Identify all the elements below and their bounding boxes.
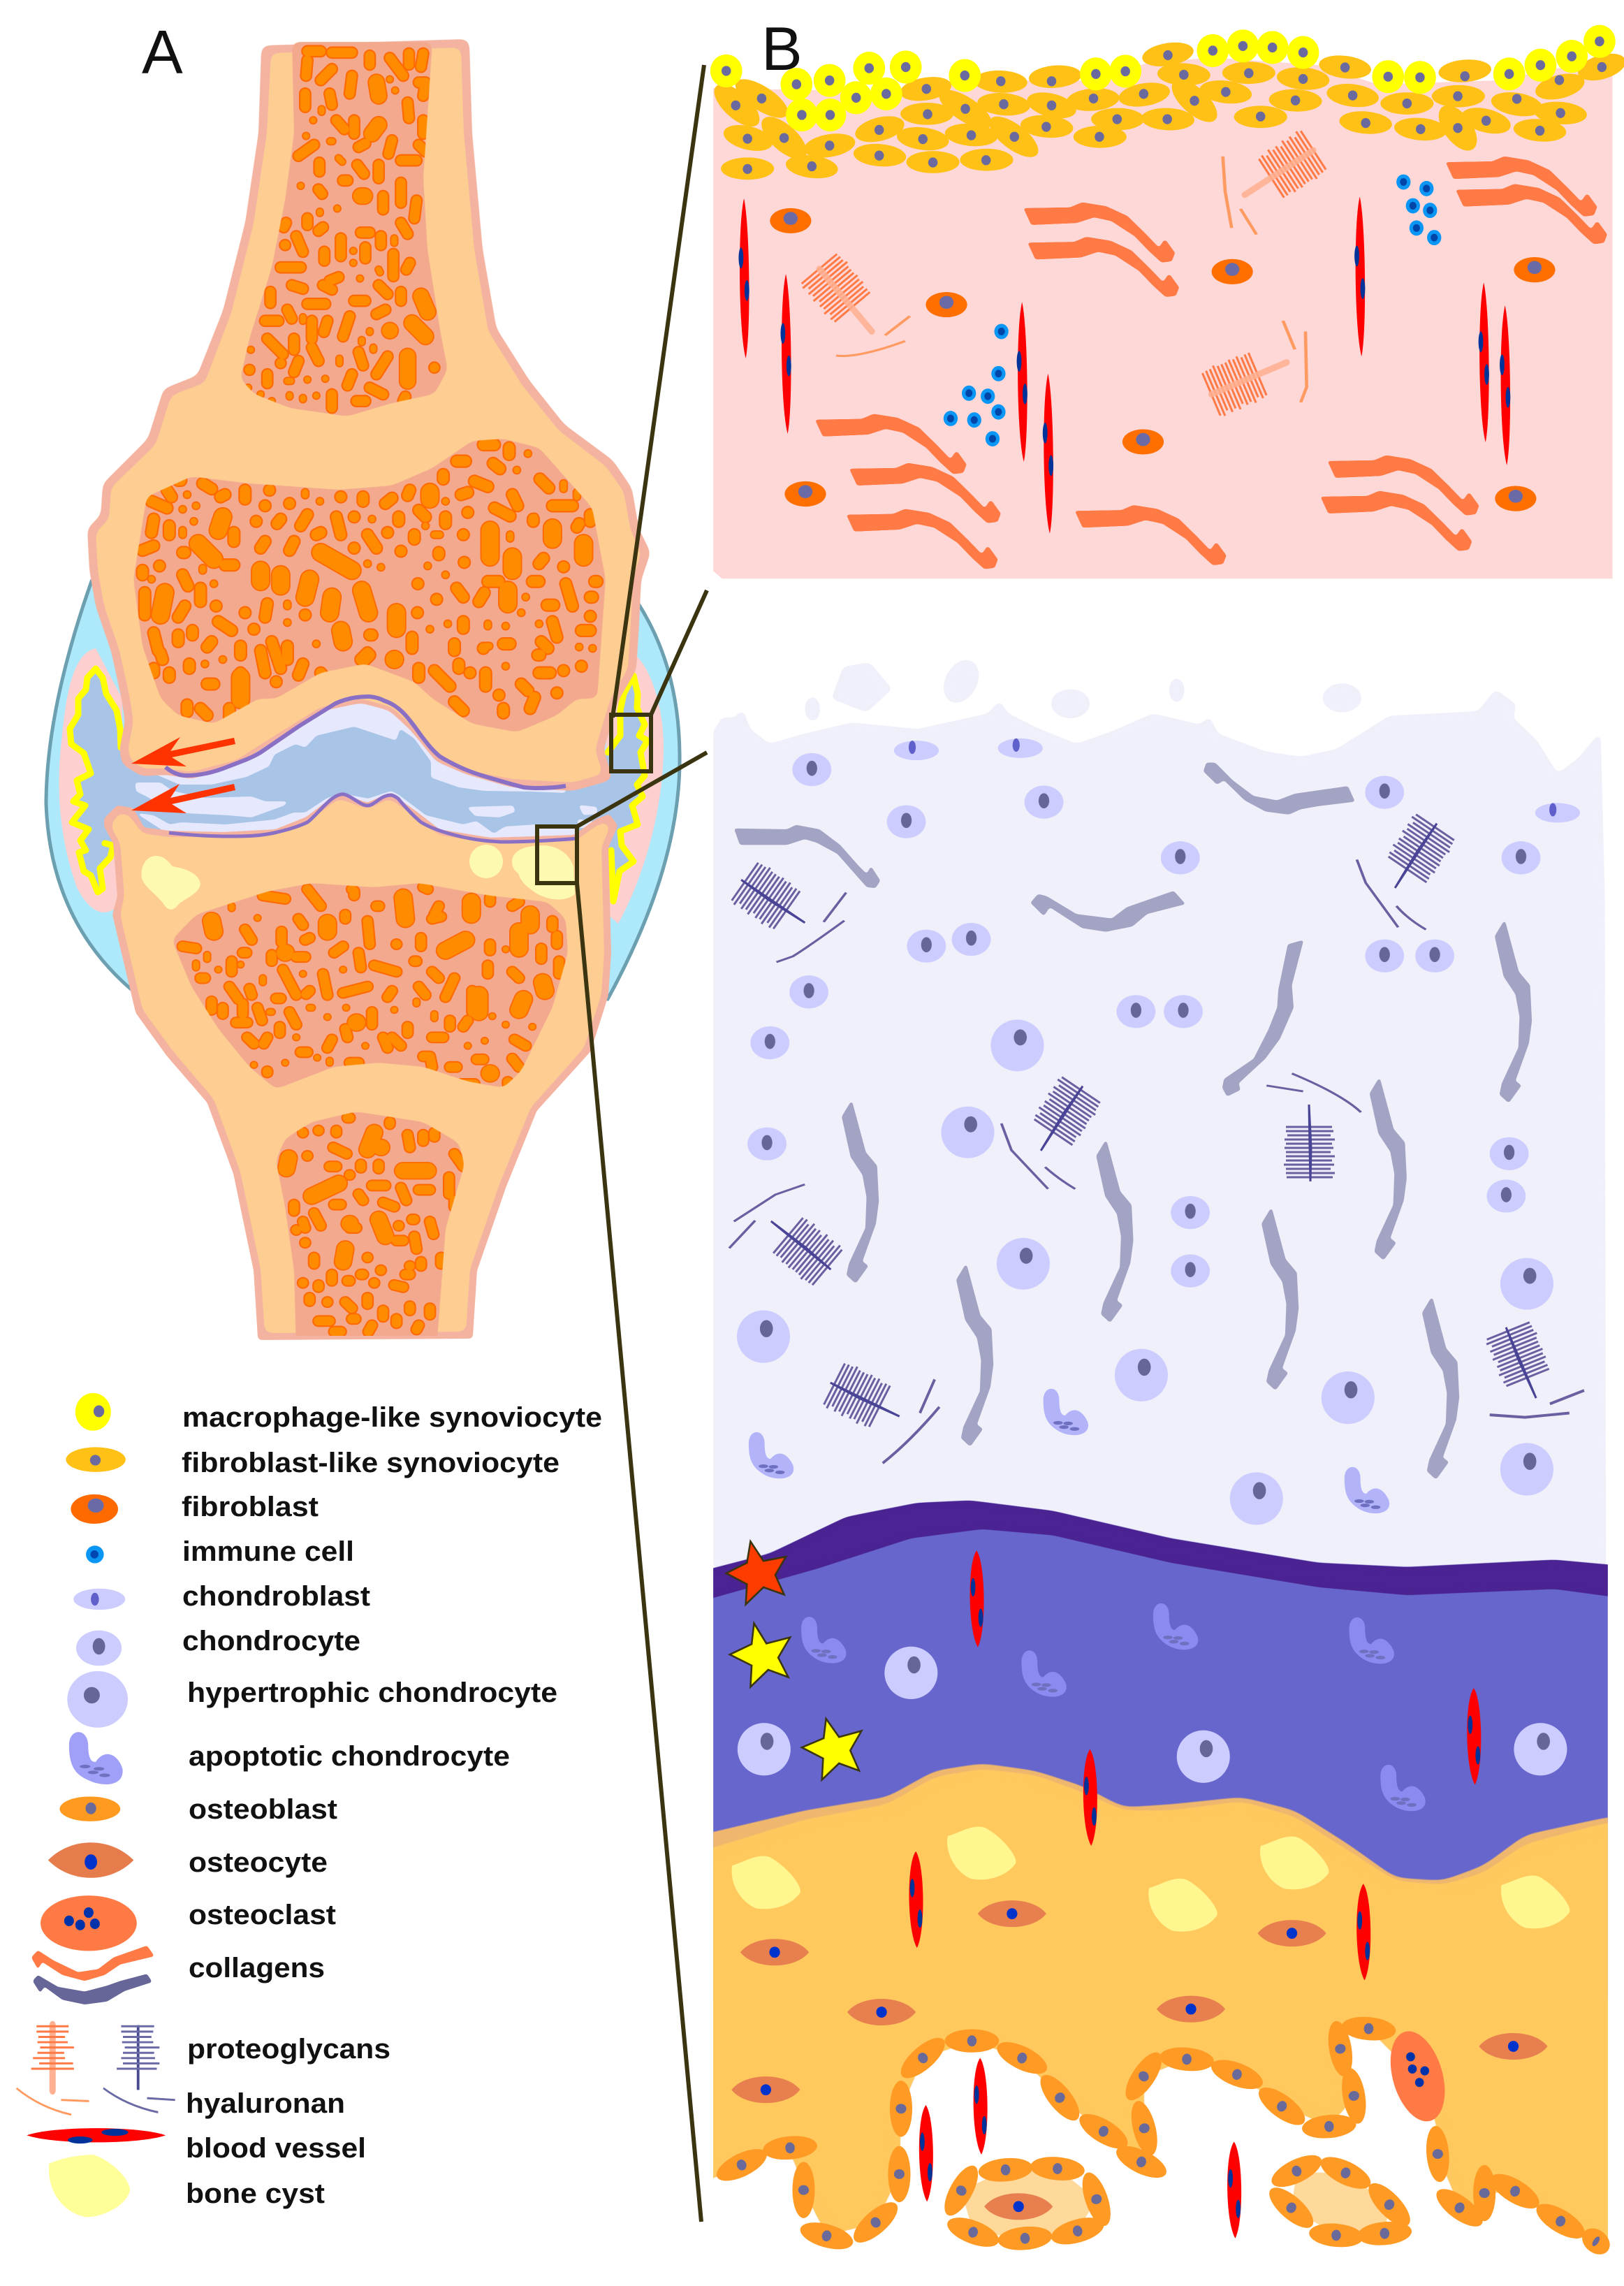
cartilage matrix background [713, 657, 1606, 1568]
red arrows [131, 737, 235, 813]
legend labels: immune cell [182, 1536, 354, 1567]
synovial lining right [608, 676, 648, 901]
synovial tissue background [713, 57, 1613, 578]
legend icons [17, 1393, 175, 2217]
panel A: knee joint [46, 17, 707, 2222]
icon: collagens [31, 1946, 154, 2004]
icon: chondrocyte [76, 1631, 122, 1666]
icon: proteoglycans [31, 2025, 159, 2090]
legend labels: bone cyst [186, 2178, 325, 2209]
legend labels: fibroblast [182, 1492, 319, 1522]
icon: bone cyst [49, 2155, 130, 2217]
blood vessels [738, 196, 1510, 534]
blood vessels in bone [909, 1550, 1481, 2238]
hypertrophic chondrocytes lower [737, 1311, 1553, 1525]
icon: osteoclast [41, 1895, 137, 1951]
tibia body [112, 799, 610, 1333]
osteocytes [731, 1900, 1548, 2220]
synovial lining left [70, 669, 121, 892]
immune cells [944, 175, 1441, 446]
hyaluronan purple [729, 859, 1426, 1248]
legend labels: osteocyte [189, 1847, 328, 1878]
icon: fibroblast-like synoviocyte [66, 1447, 126, 1472]
chondrocytes [747, 753, 1540, 1288]
legend [17, 1393, 602, 2217]
proteoglycans purple [727, 810, 1560, 1439]
hypertrophic chondrocytes [941, 1019, 1553, 1310]
zoom boxes and connector lines [537, 65, 707, 2222]
calcified cartilage and tidemark [675, 1501, 1624, 2000]
legend labels: blood vessel [186, 2133, 366, 2164]
icon: hypertrophic chondrocyte [67, 1671, 128, 1728]
legend labels: proteoglycans [187, 2034, 390, 2065]
stars: yellow two [802, 1719, 861, 1780]
osteoblasts [712, 2015, 1615, 2259]
tibial shaft marrow [277, 1112, 464, 1336]
bone cysts in tibia [141, 845, 575, 910]
legend labels [182, 1402, 602, 2209]
legend labels: chondroblast [182, 1581, 370, 1612]
icon: apoptotic chondrocyte [69, 1732, 123, 1784]
macrophage-like synoviocytes [710, 25, 1616, 131]
osteoclast [1381, 2025, 1454, 2128]
femur [92, 43, 646, 787]
label A: A [142, 17, 183, 87]
icon: osteoblast [59, 1796, 120, 1821]
hyaluronan orange [836, 156, 1307, 402]
subchondral bone [713, 1763, 1608, 2251]
legend labels: collagens [189, 1953, 325, 1983]
stars: red [726, 1541, 786, 1604]
legend labels: fibroblast-like synoviocyte [182, 1448, 559, 1478]
fibroblast-like synoviocytes [705, 38, 1624, 182]
icon: hyaluronan [17, 2088, 175, 2115]
grey collagen fibres [734, 762, 1531, 1478]
icon: macrophage-like synoviocyte [75, 1393, 111, 1431]
panel B bottom: cartilage and bone [675, 657, 1624, 2286]
tibial condyle marrow [168, 877, 573, 1093]
collagen fibres orange [817, 157, 1606, 568]
bone cysts [732, 1826, 1570, 1932]
icon: osteocyte [48, 1842, 133, 1878]
synovial membrane left [59, 648, 122, 912]
chondrocytes in calcified layer [738, 1647, 1567, 1783]
tibia [107, 796, 615, 1337]
icon: immune cell [86, 1545, 104, 1564]
chondroblasts [894, 738, 1580, 822]
femoral cartilage line [166, 697, 566, 788]
tibial cartilage line [169, 794, 578, 842]
legend labels: osteoblast [189, 1794, 337, 1825]
femur body [96, 48, 641, 782]
label B: B [761, 14, 803, 83]
legend labels: apoptotic chondrocyte [189, 1741, 510, 1772]
synovial membrane right [601, 653, 664, 924]
apoptotic chondrocytes in calcified layer [801, 1603, 1426, 1811]
bone islands [961, 2169, 1389, 2238]
stars: yellow one [730, 1624, 790, 1687]
legend labels: chondrocyte [182, 1626, 360, 1657]
legend labels: macrophage-like synoviocyte [182, 1402, 602, 1433]
synovial fluid cavity [70, 669, 648, 901]
fibroblasts [770, 208, 1556, 511]
proteoglycans orange [800, 129, 1327, 418]
icon: fibroblast [71, 1494, 118, 1524]
panel B top: synovium [705, 14, 1624, 578]
hyaluronan purple lower [883, 1379, 1584, 1463]
legend labels: hyaluronan [186, 2088, 345, 2119]
joint capsule [46, 581, 680, 999]
cartilage remnants [135, 697, 597, 843]
apoptotic chondrocytes in cartilage [749, 1389, 1389, 1513]
femoral shaft marrow [237, 35, 454, 426]
femoral condyle marrow [126, 433, 615, 741]
icon: chondroblast [73, 1589, 125, 1610]
legend labels: hypertrophic chondrocyte [187, 1677, 557, 1708]
legend labels: osteoclast [189, 1900, 336, 1930]
icon: blood vessel [27, 2128, 166, 2143]
